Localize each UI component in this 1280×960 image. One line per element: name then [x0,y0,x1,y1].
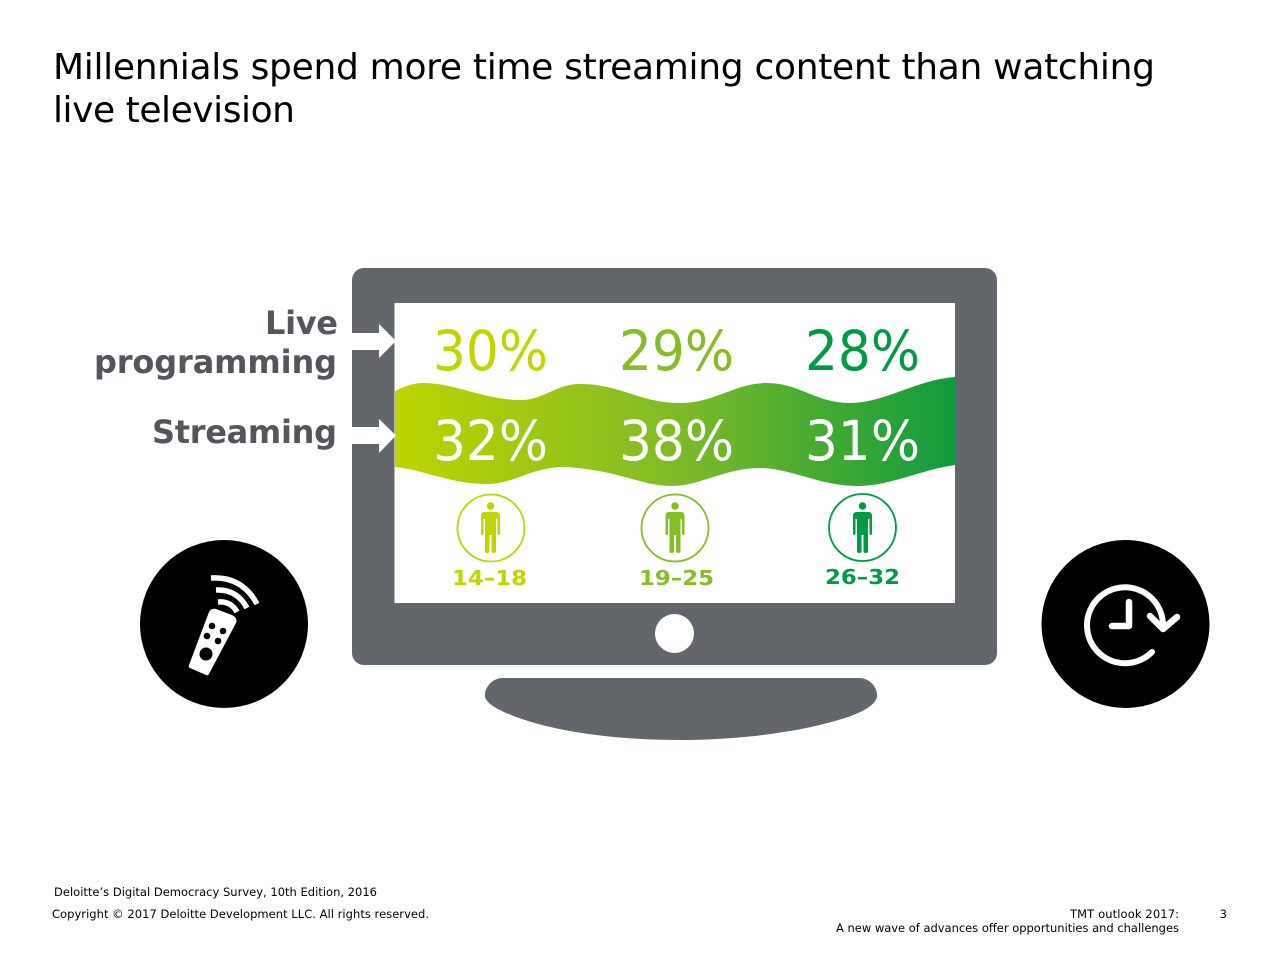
label: 19-25: 19–25 [639,566,714,590]
label: streaming: Streaming [152,413,337,451]
age group 26-32 [825,494,900,589]
icon: clock with arrow [1042,540,1210,708]
title: Millennials spend more time streaming content than watching [53,47,1155,88]
live programming percentages [433,319,920,383]
footer deck title: TMT outlook 2017: [1069,907,1179,921]
footer deck title: A new wave of advances offer opportunities and challenges [836,921,1179,935]
age group 19-25 [639,494,714,590]
page number: 3 [1220,907,1227,921]
copyright: Copyright © 2017 Deloitte Development LLC. All rights reserved. [52,907,429,921]
arrow: live programming [352,324,396,358]
tv stand [485,678,877,740]
label: 14-18: 14–18 [452,566,527,590]
title [53,47,1155,131]
icon: remote control [140,540,308,708]
tv screen [394,303,955,603]
source note: Deloitte’s Digital Democracy Survey, 10th Edition, 2016 [54,885,377,899]
title: live television [53,90,295,131]
live programming percentages: 30% [433,319,548,383]
age group 14-18 [452,494,527,590]
icon: person 26-32 [829,494,896,561]
streaming percentages [433,409,920,473]
live programming percentages: 29% [619,319,734,383]
streaming percentages: 32% [433,409,548,473]
label: live programming: Live [265,304,338,342]
streaming percentages: 38% [619,409,734,473]
icon: person 14-18 [458,494,524,562]
label: live programming [94,304,338,381]
live programming percentages: 28% [805,319,920,383]
streaming percentages: 31% [805,409,920,473]
footer deck title [836,907,1179,935]
label: live programming: programming [94,343,337,381]
label: 26-32: 26–32 [825,565,900,589]
tv power button [655,614,694,653]
streaming wave band [395,377,955,486]
television [352,268,997,740]
tv bezel [352,268,997,665]
arrow: streaming [352,419,396,453]
icon: person 19-25 [642,494,708,562]
